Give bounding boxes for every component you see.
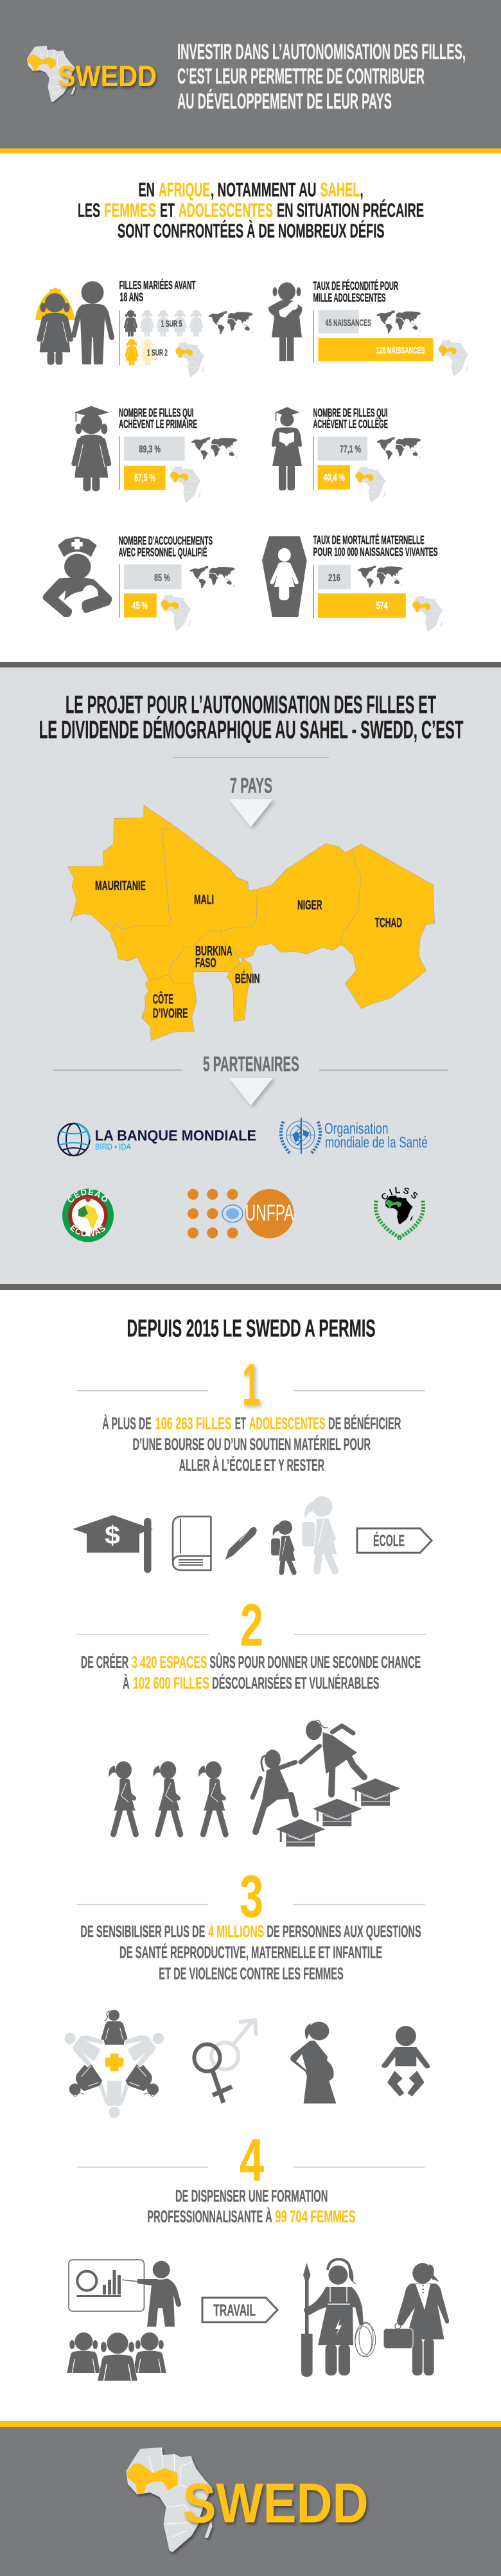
panel: maternal mortality: [262, 533, 443, 632]
text: step 1: DE BÉNÉFICIER: [328, 1414, 401, 1433]
arrow: to map: [229, 799, 273, 827]
map labels: MAURITANIE: [95, 879, 146, 893]
icon: training board with teacher: [69, 2260, 181, 2327]
heading: challenges: [78, 178, 424, 242]
icon: nurse with baby: [43, 537, 112, 617]
heading: challenges: ,: [360, 178, 364, 201]
country: Mauritanie: [68, 805, 177, 933]
logo: La Banque mondiale: BIRD • IDA: [95, 1141, 131, 1151]
logo: UNFPA: [188, 1189, 294, 1239]
sign: travail: [202, 2298, 277, 2322]
map: seven countries: [68, 805, 435, 1041]
heading: challenges: SAHEL: [320, 178, 360, 201]
step 3: [64, 1863, 430, 2118]
label: accouchements: [119, 535, 213, 559]
map labels: CÔTE: [153, 992, 173, 1007]
icon: coffin: [262, 536, 307, 617]
bar: 40,4 %: [317, 465, 385, 503]
label: mortalité: [313, 533, 438, 559]
label: accouchements: NOMBRE D'ACCOUCHEMENTS: [119, 535, 213, 548]
text: step 2: DE CRÉER: [81, 1653, 128, 1672]
map labels: MALI: [194, 893, 214, 908]
map labels: FASO: [195, 956, 216, 970]
bar: 89,3 %: 89,3 %: [139, 444, 161, 455]
text: step 2: 3 420 ESPACES: [132, 1654, 207, 1672]
bar: 45 %: 45 %: [132, 600, 148, 611]
logo: OMS: mondiale de la Santé: [325, 1134, 428, 1152]
logo: OMS: Organisation: [324, 1120, 388, 1138]
chart: 1 sur 5 world: [125, 310, 253, 337]
step 4: [67, 2126, 449, 2381]
bar: 216: 216: [328, 573, 340, 584]
heading: challenges: AFRIQUE: [159, 178, 210, 201]
icon: girl helped up the steps: [252, 1720, 364, 1832]
step 1: [73, 1352, 432, 1573]
text: step 3: ET DE VIOLENCE CONTRE LES FEMMES: [159, 1965, 344, 1983]
chart: 1 sur 2 Sahel: [126, 339, 204, 377]
bar: 574: [318, 593, 443, 632]
bar: 216: [318, 565, 403, 589]
logo: OMS: [281, 1118, 428, 1154]
country: Côte d'Ivoire: [141, 975, 197, 1041]
icon: three trainees: [67, 2332, 166, 2381]
bar: 45 naissances: 45 NAISSANCES: [325, 318, 371, 328]
text: step 1: À PLUS DE: [102, 1414, 152, 1433]
chart: 1 sur 5 world: 1 SUR 5: [161, 318, 182, 329]
text: step 4: 99 704 FEMMES: [275, 2208, 356, 2226]
logo: Africa map with SWEDD: SWEDD: [58, 60, 157, 93]
label: collège: NOMBRE DE FILLES QUI: [313, 406, 388, 419]
icon: baby: [382, 2026, 430, 2097]
header title: [177, 40, 466, 114]
heading: 5 partenaires: 5 PARTENAIRES: [203, 1053, 299, 1076]
text: step 3: 4 MILLIONS: [208, 1923, 264, 1941]
logo: La Banque mondiale: LA BANQUE MONDIALE: [95, 1127, 256, 1143]
map labels: NIGER: [297, 898, 322, 913]
icon: small girl with backpack: [271, 1521, 295, 1573]
bar: 67,5 %: [124, 466, 200, 503]
text: step 1: 106 263 FILLES: [155, 1415, 232, 1433]
icon: business woman with briefcase: [383, 2263, 449, 2375]
panel: college: [272, 406, 421, 503]
number 1: 1: [242, 1352, 260, 1418]
panel: fertility: [268, 279, 468, 376]
heading: challenges: EN: [138, 178, 155, 201]
heading: challenges: ET: [160, 199, 175, 221]
icon: graduate with book: [272, 407, 302, 490]
label: primaire: NOMBRE DE FILLES QUI: [119, 406, 194, 419]
bar: 77,1 %: 77,1 %: [340, 444, 361, 455]
label: fécondité: TAUX DE FÉCONDITÉ POUR: [313, 279, 398, 292]
heading: challenges: , NOTAMMENT AU: [211, 178, 316, 201]
panel: early marriage: [35, 278, 253, 377]
bar: 85 %: 85 %: [154, 573, 170, 584]
panel: primary school: [74, 406, 238, 503]
text: step 4: PROFESSIONNALISANTE À: [147, 2208, 272, 2226]
step 2: [76, 1592, 426, 1847]
text: step 1: ALLER À L’ÉCOLE ET Y RESTER: [179, 1456, 324, 1474]
heading: challenges: FEMMES: [104, 199, 156, 221]
country: Niger: [220, 844, 361, 959]
bar: 45 %: [124, 593, 191, 631]
logo: Africa map with SWEDD: [27, 46, 157, 102]
text: step 2: 102 600 FILLES: [133, 1675, 209, 1693]
panel: SWEDD project background: [0, 662, 501, 1290]
bar: 89,3 %: [124, 436, 238, 461]
text: step 1: [102, 1414, 401, 1474]
number 4: 4: [240, 2126, 264, 2193]
logo: CILSS: CILSS: [382, 1186, 418, 1199]
logo: CILSS: [374, 1186, 425, 1240]
label: filles mariées: [119, 278, 196, 304]
text: step 1: ET: [235, 1415, 246, 1433]
icon: pregnant woman: [290, 2022, 336, 2104]
icon: health discussion circle: [64, 2010, 164, 2118]
number 3: 3: [240, 1863, 263, 1929]
text: step 3: DE SENSIBILISER PLUS DE: [80, 1923, 205, 1941]
icon: big girl with backpack: [302, 1496, 337, 1571]
panel: qualified deliveries: [43, 535, 235, 631]
icon: scholarship cap: [73, 1515, 153, 1573]
icon: bride and groom: [35, 282, 114, 365]
bar: 128 naissances: 128 NAISSANCES: [376, 345, 425, 356]
bar: 85 %: [124, 564, 235, 589]
map labels: D’IVOIRE: [153, 1006, 188, 1021]
label: primaire: ACHÈVENT LE PRIMAIRE: [119, 417, 197, 431]
bar: 45 naissances: [319, 310, 421, 334]
bar: 40,4 %: 40,4 %: [324, 472, 345, 483]
number 2: 2: [240, 1592, 263, 1659]
heading: 7 pays: 7 PAYS: [230, 773, 272, 797]
sign: école: ÉCOLE: [373, 1532, 405, 1550]
logo: La Banque mondiale: [58, 1123, 256, 1156]
country: Bénin: [227, 959, 252, 1021]
text: step 3: [80, 1923, 421, 1983]
map labels: BÉNIN: [235, 971, 259, 986]
map labels: BURKINA: [195, 944, 233, 959]
label: filles mariées: 18 ANS: [119, 291, 143, 304]
footer band: [0, 2421, 501, 2576]
map labels: TCHAD: [375, 915, 402, 930]
logo: CEDEAO ECOWAS: ECOWAS: [69, 1225, 105, 1237]
footer logo: SWEDD: [183, 2473, 369, 2535]
icon: gender symbols: [194, 2020, 256, 2103]
bar: 77,1 %: [317, 436, 421, 461]
text: step 4: [147, 2188, 356, 2226]
label: filles mariées: FILLES MARIÉES AVANT: [119, 278, 196, 292]
icon: electrician with screwdriver: [301, 2259, 376, 2377]
bar: 67,5 %: 67,5 %: [134, 472, 155, 483]
text: step 4: DE DISPENSER UNE FORMATION: [175, 2188, 328, 2206]
text: step 2: [81, 1652, 421, 1693]
bar: 574: 574: [376, 601, 388, 612]
bar: 128 naissances: [319, 338, 468, 376]
text: step 2: À: [123, 1674, 130, 1693]
icon: walking girls: [109, 1761, 225, 1834]
country: Tchad: [340, 844, 435, 1008]
label: collège: ACHÈVENT LE COLLÈGE: [313, 417, 388, 431]
icon: graduation caps: [276, 1778, 401, 1847]
label: primaire: [119, 406, 197, 431]
heading: challenges: LES: [78, 199, 100, 221]
text: step 1: ADOLESCENTES: [249, 1415, 325, 1433]
map labels: [95, 879, 402, 1021]
icon: book: [173, 1517, 211, 1570]
logo: CEDEAO ECOWAS: [62, 1189, 114, 1242]
label: collège: [313, 406, 388, 431]
label: fécondité: MILLE ADOLESCENTES: [313, 291, 385, 304]
sign: école: [357, 1528, 432, 1553]
logo: UNFPA: UNFPA: [245, 1201, 294, 1226]
heading: project: [39, 691, 464, 744]
header band: [0, 0, 501, 154]
icon: girl with mortarboard: [74, 406, 109, 491]
chart: 1 sur 2 Sahel: 1 SUR 2: [147, 347, 168, 358]
icon: scholarship cap: $: [105, 1521, 120, 1550]
label: accouchements: AVEC PERSONNEL QUALIFIÉ: [119, 546, 207, 559]
country: Burkina Faso: [170, 930, 240, 983]
country: Mali: [110, 828, 257, 980]
icon: girl holding baby: [268, 282, 302, 361]
heading: challenges: ADOLESCENTES: [179, 199, 273, 221]
arrow: to partners: [229, 1078, 273, 1105]
label: fécondité: [313, 279, 398, 304]
text: step 2: DÉSCOLARISÉES ET VULNÉRABLES: [212, 1674, 379, 1693]
logo: CEDEAO ECOWAS: CEDEAO: [68, 1189, 108, 1203]
sign: travail: TRAVAIL: [213, 2302, 256, 2320]
icon: pen: [225, 1527, 257, 1560]
footer logo: [126, 2447, 369, 2552]
